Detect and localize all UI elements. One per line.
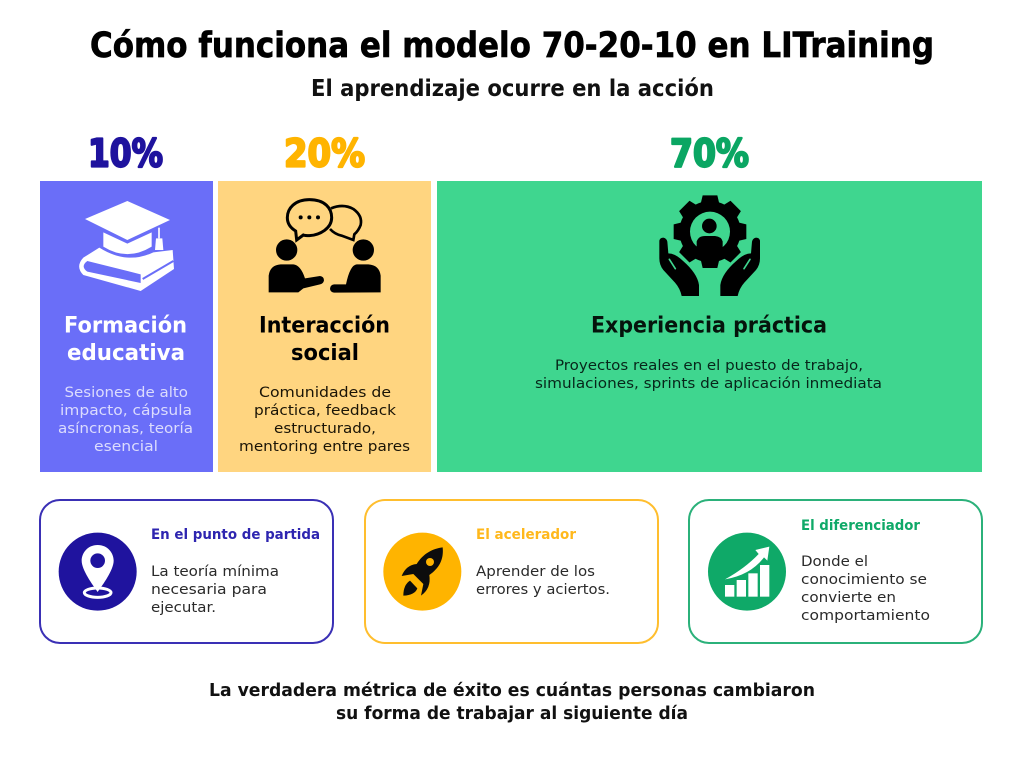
subtitle: El aprendizaje ocurre en la acción bbox=[311, 76, 714, 102]
card heading: En el punto de partida bbox=[151, 527, 320, 543]
panel: interacción social bbox=[218, 181, 431, 472]
card heading: El diferenciador bbox=[801, 518, 920, 534]
card text bbox=[151, 564, 279, 616]
card text: Donde el bbox=[801, 554, 868, 570]
description: estructurado, bbox=[274, 421, 376, 437]
title: Cómo funciona el modelo 70-20-10 en LITraining bbox=[90, 26, 934, 66]
closing statement: su forma de trabajar al siguiente día bbox=[336, 703, 688, 724]
icon: graduation cap on book bbox=[79, 201, 174, 291]
icon: two people talking bbox=[269, 200, 381, 293]
card text: necesaria para bbox=[151, 582, 267, 598]
heading: social bbox=[291, 341, 359, 366]
icon: gear and person in hands bbox=[659, 195, 760, 296]
percentage: 20%: 20% bbox=[284, 132, 365, 176]
description bbox=[58, 385, 193, 455]
card text bbox=[476, 564, 610, 598]
card text: conocimiento se bbox=[801, 572, 927, 588]
description bbox=[535, 358, 882, 392]
card text: Aprender de los bbox=[476, 564, 595, 580]
description: Comunidades de bbox=[259, 385, 391, 401]
card text: convierte en bbox=[801, 590, 896, 606]
percentage: 10%: 10% bbox=[88, 132, 163, 176]
card text: ejecutar. bbox=[151, 600, 216, 616]
description: Sesiones de alto bbox=[64, 385, 188, 401]
description: asíncronas, teoría bbox=[58, 421, 193, 437]
panel: formación educativa bbox=[40, 181, 213, 472]
card: el acelerador bbox=[365, 500, 658, 643]
percentage: 70%: 70% bbox=[670, 132, 749, 176]
description: impacto, cápsula bbox=[60, 403, 192, 419]
card text bbox=[801, 554, 930, 624]
closing statement: La verdadera métrica de éxito es cuántas personas cambiaron bbox=[209, 680, 815, 701]
panel: experiencia práctica bbox=[437, 181, 982, 472]
heading: educativa bbox=[67, 341, 185, 366]
description: mentoring entre pares bbox=[239, 439, 410, 455]
card text: comportamiento bbox=[801, 608, 930, 624]
card: el diferenciador bbox=[689, 500, 982, 643]
heading bbox=[64, 314, 187, 366]
heading: Interacción bbox=[259, 314, 390, 338]
icon: rocket bbox=[383, 533, 461, 611]
icon: location pin bbox=[59, 533, 137, 611]
card text: errores y aciertos. bbox=[476, 582, 610, 598]
card heading: El acelerador bbox=[476, 527, 576, 543]
heading: Experiencia práctica bbox=[591, 314, 827, 338]
description: Proyectos reales en el puesto de trabajo, bbox=[555, 358, 863, 374]
description: simulaciones, sprints de aplicación inmediata bbox=[535, 376, 882, 392]
closing statement bbox=[209, 680, 815, 724]
heading: Formación bbox=[64, 314, 187, 338]
card text: La teoría mínima bbox=[151, 564, 279, 580]
card: en el punto de partida bbox=[40, 500, 333, 643]
description: esencial bbox=[94, 439, 158, 455]
description: práctica, feedback bbox=[254, 403, 397, 419]
heading bbox=[259, 314, 390, 366]
icon: growth chart bbox=[708, 533, 786, 611]
description bbox=[239, 385, 410, 455]
